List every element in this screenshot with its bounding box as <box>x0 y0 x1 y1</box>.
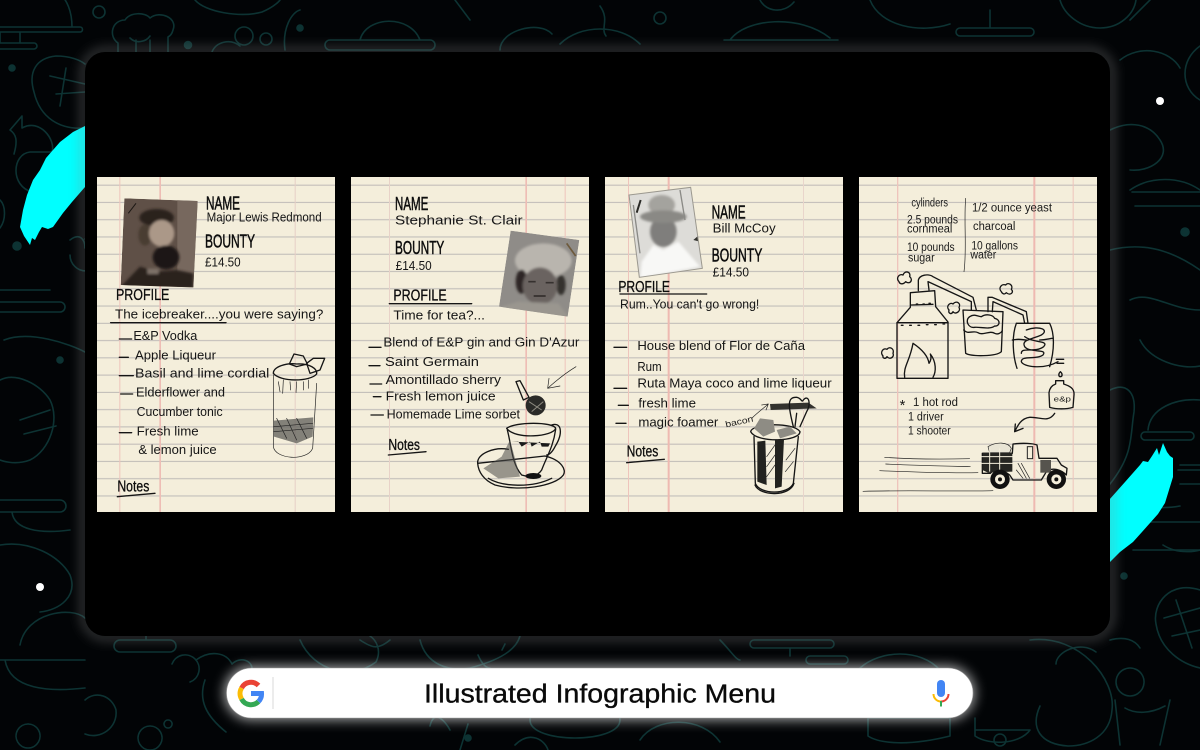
ingredient list: Apple Liqueur <box>135 347 217 362</box>
ingredient list: Fresh lime <box>137 423 199 438</box>
icon: Google G logo <box>240 682 262 705</box>
ingredient list: Amontillado sherry <box>386 372 501 387</box>
bacon label: bacon <box>724 414 754 429</box>
ingredient list: magic foamer <box>638 415 719 430</box>
ingredient list <box>369 335 580 421</box>
ingredient list: Rum <box>637 359 662 374</box>
left cyan brush stroke <box>20 126 85 245</box>
recipe ingredients: 10 pounds <box>907 240 955 254</box>
icon: foamy cocktail with bacon <box>751 397 817 494</box>
ingredient list: & lemon juice <box>138 442 217 457</box>
icon: still boiler with flame <box>897 275 976 378</box>
bounty label: BOUNTY <box>205 230 255 251</box>
name value: Major Lewis Redmond <box>207 210 322 225</box>
profile tagline: The icebreaker....you were saying? <box>115 306 323 321</box>
card 2: Stephanie St. Clair <box>351 177 589 512</box>
recipe ingredients: cylinders <box>911 196 948 210</box>
decorative white dot bottom left <box>36 583 44 591</box>
icon: E&P bottle: e&p <box>1054 395 1071 404</box>
recipe ingredients: 2.5 pounds <box>907 212 958 226</box>
card 3: Bill McCoy <box>605 177 843 512</box>
ingredient list: Basil and lime cordial <box>135 365 269 380</box>
search bar glow <box>224 666 975 720</box>
recipe ingredients: sugar <box>908 251 935 265</box>
icon: speed lines <box>863 457 993 491</box>
name value: Stephanie St. Clair <box>395 212 523 227</box>
name label: NAME <box>395 193 428 214</box>
bounty label: BOUNTY <box>712 244 762 265</box>
bounty label: BOUNTY <box>395 237 444 258</box>
card 4: moonshine still recipe <box>859 177 1097 512</box>
icon: microphone <box>934 680 948 706</box>
ingredient list <box>119 328 269 457</box>
recipe ingredients <box>907 196 1053 272</box>
ingredient list: Blend of E&P gin and Gin D'Azur <box>383 335 580 350</box>
bounty price: £14.50 <box>713 265 749 280</box>
profile tagline: Time for tea?... <box>393 307 485 322</box>
ingredient list: Homemade Lime sorbet <box>387 406 520 421</box>
icon: steam puffs <box>882 272 1012 358</box>
crew list: * <box>900 398 906 414</box>
profile heading: PROFILE <box>116 287 169 304</box>
main black panel <box>85 52 1110 636</box>
ingredient list: House blend of Flor de Caña <box>637 338 806 353</box>
search bar <box>226 668 973 718</box>
ingredient list: Saint Germain <box>385 354 479 369</box>
icon: condenser coil <box>1012 323 1064 377</box>
icon: E&P bottle <box>1049 381 1074 409</box>
ingredient list: Ruta Maya coco and lime liqueur <box>637 375 832 390</box>
profile heading: PROFILE <box>618 279 670 296</box>
recipe ingredients: cornmeal <box>907 222 952 236</box>
crew list <box>900 395 958 437</box>
name label: NAME <box>712 201 746 222</box>
name label: NAME <box>206 192 240 213</box>
recipe ingredients: 1/2 ounce yeast <box>972 201 1053 215</box>
decorative white dot top right <box>1156 97 1164 105</box>
bounty price: £14.50 <box>396 258 432 273</box>
profile tagline: Rum..You can't go wrong! <box>620 296 759 311</box>
recipe ingredients: charcoal <box>973 219 1015 233</box>
card 1: Major Lewis Redmond <box>97 177 335 512</box>
notes heading: Notes <box>388 437 420 454</box>
recipe ingredients: 10 gallons <box>971 238 1018 252</box>
portrait photo <box>499 231 579 317</box>
recipe ingredients: water <box>969 247 996 261</box>
icon: tall cocktail glass <box>273 354 325 457</box>
icon: teacup and saucer <box>478 423 564 488</box>
ingredient list: Cucumber tonic <box>137 404 223 419</box>
arrow to bacon <box>752 404 768 418</box>
crew list: 1 hot rod <box>913 395 958 409</box>
notes heading: Notes <box>627 444 659 461</box>
icon: tea infuser <box>516 381 546 415</box>
crew list: 1 shooter <box>908 423 951 437</box>
ingredient list: Elderflower and <box>136 385 225 400</box>
profile heading: PROFILE <box>393 288 447 305</box>
notes heading: Notes <box>117 479 150 496</box>
name value: Bill McCoy <box>713 220 776 235</box>
panel glow <box>84 51 1111 637</box>
right cyan brush stroke <box>1109 443 1173 563</box>
ingredient list: fresh lime <box>638 395 696 410</box>
portrait photo <box>121 198 201 288</box>
bounty price: £14.50 <box>205 255 241 270</box>
arrow to truck <box>1015 413 1055 432</box>
ingredient list: Fresh lemon juice <box>386 389 496 404</box>
portrait photo <box>629 187 702 278</box>
icon: fermenting tank <box>963 297 1028 356</box>
crew list: 1 driver <box>908 410 944 424</box>
ingredient list: E&P Vodka <box>133 328 198 343</box>
search bar title: Illustrated Infographic Menu <box>424 680 776 708</box>
ingredient list <box>614 338 832 430</box>
icon: hot rod truck <box>981 443 1067 489</box>
arrow to tea infuser <box>548 367 576 388</box>
